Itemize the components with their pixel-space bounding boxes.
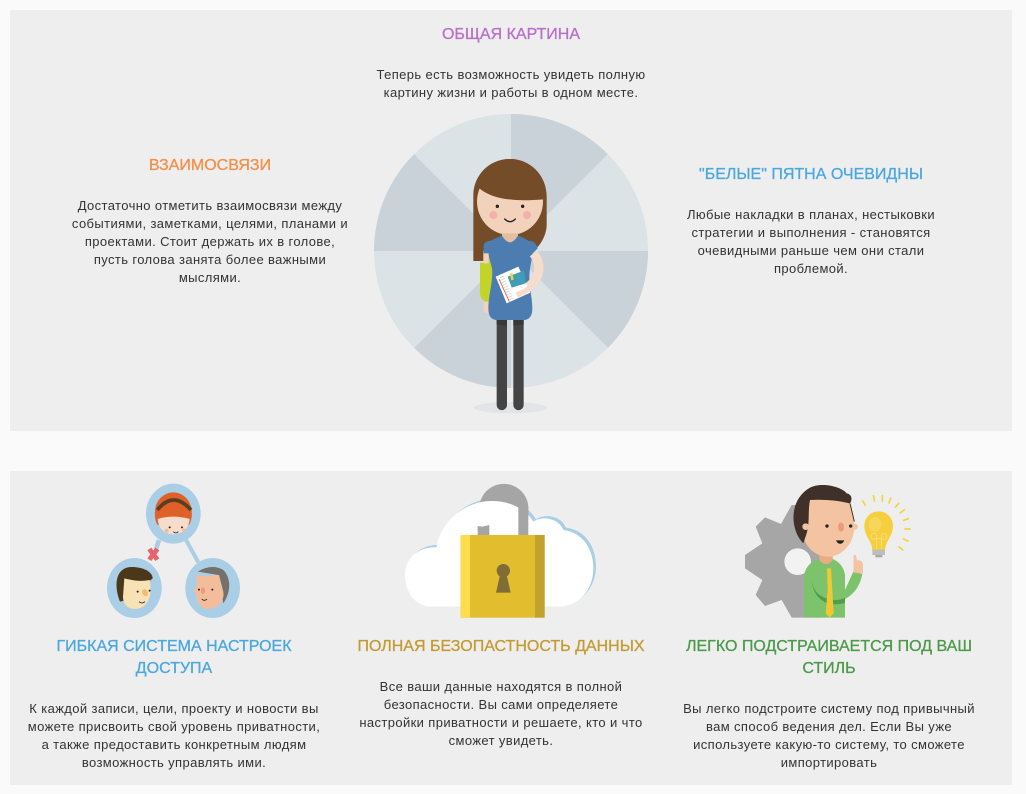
text: access [28,701,320,770]
heading: overall picture: ОБЩАЯ КАРТИНА [442,26,580,43]
heading: security: ПОЛНАЯ БЕЗОПАСТНОСТЬ ДАННЫХ [357,638,645,655]
text: connections: пусть голова занята более важными [94,252,326,267]
text: connections: мыслями. [179,270,241,285]
text: access: можете присвоить свой уровень приватности, [28,719,320,734]
panel: top background [10,10,1012,431]
text: style: вам способ ведения дел. Если Вы уже [706,719,952,734]
text: style: Вы легко подстроите систему под привычный [683,701,975,716]
text: style [683,701,975,770]
heading: white spots: "БЕЛЫЕ" ПЯТНА ОЧЕВИДНЫ [699,166,923,183]
heading: style [686,638,972,677]
text: white spots: стратегии и выполнения - становятся [691,225,931,240]
text: access: возможность управлять ими. [82,755,266,770]
text: style: используете какую-то систему, то сможете [693,737,965,752]
text: security: настройки приватности и решаете, кто и что [359,715,643,730]
pie wheel [374,114,648,388]
heading: connections: ВЗАИМОСВЯЗИ [149,157,271,174]
text: overall picture: картину жизни и работы в одном месте. [384,85,638,100]
text: access: а также предоставить конкретным людям [42,737,306,752]
heading: style: ЛЕГКО ПОДСТРАИВАЕТСЯ ПОД ВАШ [686,638,972,655]
text: connections: Достаточно отметить взаимосвязи между [78,198,342,213]
text: security [359,679,643,748]
heading: style: СТИЛЬ [802,660,856,677]
text: access: К каждой записи, цели, проекту и новости вы [29,701,319,716]
text: security: сможет увидеть. [449,733,553,748]
text: overall picture: Теперь есть возможность увидеть полную [376,67,646,82]
text: white spots: Любые накладки в планах, нестыковки [687,207,935,222]
heading: access: ГИБКАЯ СИСТЕМА НАСТРОЕК [56,638,292,655]
text: security: Все ваши данные находятся в полной [380,679,622,694]
heading: access: ДОСТУПА [136,660,212,677]
text: security: безопасности. Вы сами определяете [384,697,618,712]
text: white spots: проблемой. [774,261,848,276]
text: white spots: очевидными раньше чем они стали [698,243,924,258]
text: white spots [687,207,935,276]
text: connections [72,198,348,285]
text: connections: событиями, заметками, целями, планами и [72,216,348,231]
text: connections: проектами. Стоит держать их в голове, [85,234,335,249]
heading: access [56,638,292,677]
icon: padlock and cloud [405,484,596,618]
text: style: импортировать [781,755,877,770]
icon: man with gear and light bulb [745,485,911,618]
text: overall picture [376,67,646,100]
icon: people access network [107,484,240,618]
icon: girl with notebook [473,159,547,413]
panel: bottom background [10,471,1012,785]
